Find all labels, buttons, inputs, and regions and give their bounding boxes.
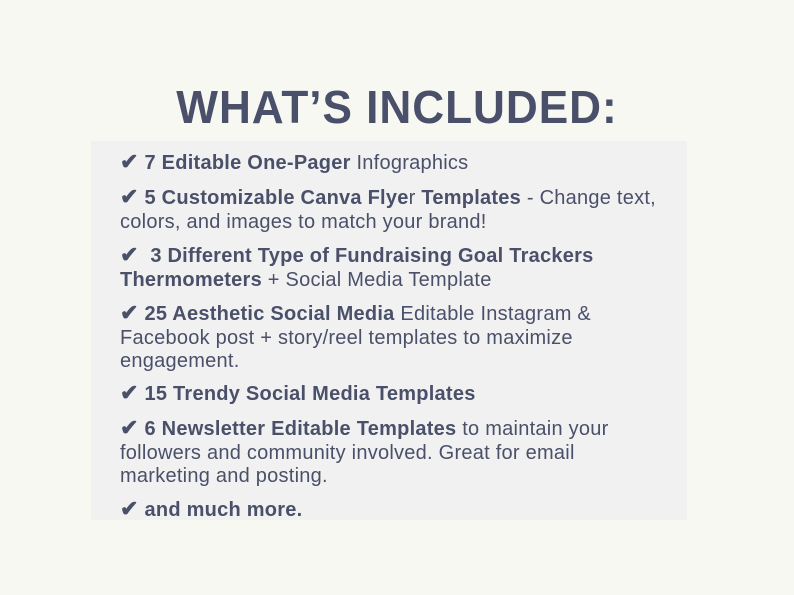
item: more: ✔ and much more. — [120, 496, 302, 521]
item: thermometers: Thermometers + Social Media Template — [120, 268, 492, 290]
item: aesthetic social: Facebook post + story/reel templates to maximize — [120, 326, 573, 348]
item: newsletter: ✔ 6 Newsletter Editable Templates to maintain your — [120, 415, 609, 440]
item: newsletter: followers and community involved. Great for email — [120, 442, 575, 464]
item: flyers — [120, 184, 656, 232]
item: thermometers: ✔ 3 Different Type of Fundraising Goal Trackers — [120, 242, 594, 267]
item: flyers: colors, and images to match your brand! — [120, 210, 487, 232]
item: aesthetic social — [120, 300, 591, 372]
item: aesthetic social: ✔ 25 Aesthetic Social Media Editable Instagram & — [120, 300, 591, 325]
item: thermometers — [120, 242, 594, 290]
item: newsletter — [120, 415, 609, 487]
item: one-pagers: ✔ 7 Editable One-Pager Infographics — [120, 149, 468, 174]
item: newsletter: marketing and posting. — [120, 465, 328, 487]
item: flyers: ✔ 5 Customizable Canva Flyer Templates - Change text, — [120, 184, 656, 209]
item: aesthetic social: engagement. — [120, 350, 240, 372]
panel: included list — [91, 141, 687, 520]
item: trendy social: ✔ 15 Trendy Social Media Templates — [120, 380, 476, 405]
title: WHAT’S INCLUDED: — [176, 81, 618, 133]
